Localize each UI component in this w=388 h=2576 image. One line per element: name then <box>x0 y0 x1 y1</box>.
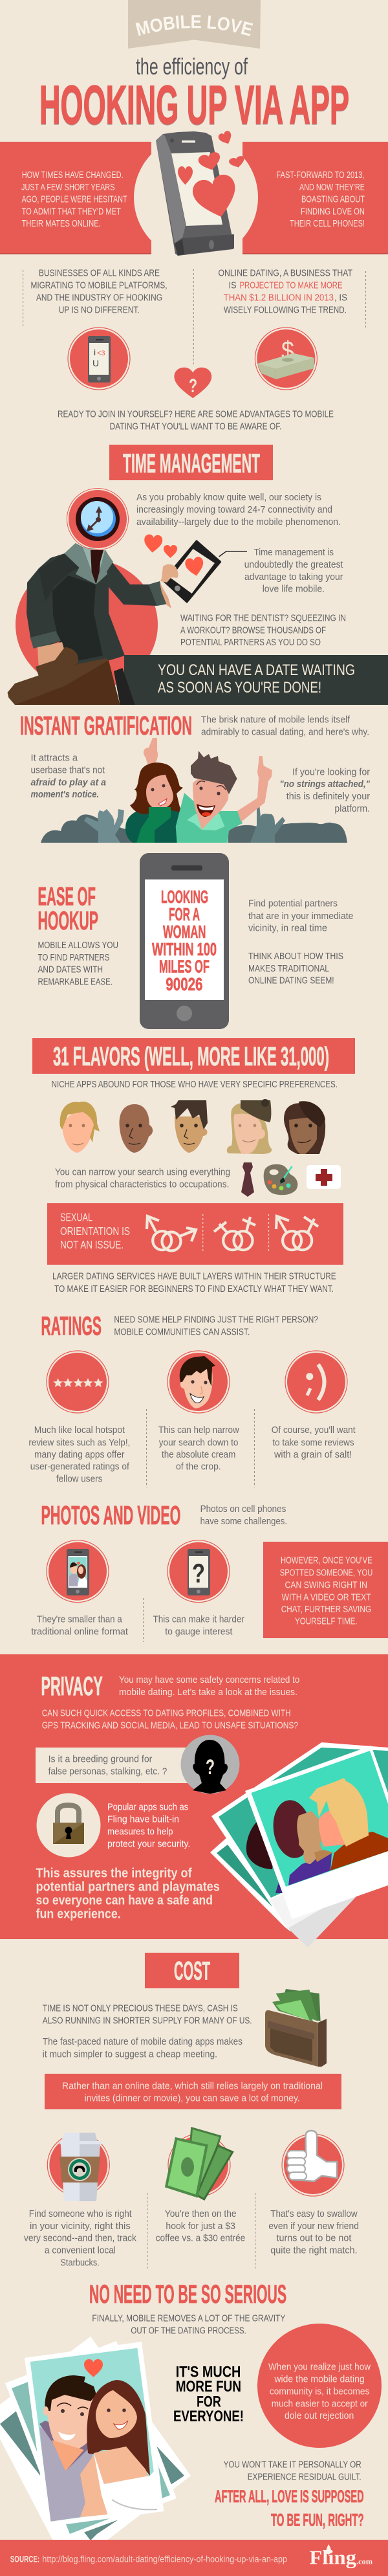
heading: ease of hookup <box>38 882 98 935</box>
text block: ready to join: READY TO JOIN IN YOURSELF? HERE ARE SOME ADVANTAGES TO MOBILE <box>58 409 334 419</box>
icon: question heart: ? <box>189 375 197 397</box>
text block: mobile allows you: REMARKABLE EASE. <box>38 977 113 987</box>
text block: rating 2 <box>158 1425 239 1472</box>
text block: find someone <box>24 2208 136 2268</box>
text block: rating 1: user-generated ratings of <box>30 1461 130 1472</box>
banner: date waiting: AS SOON AS YOU'RE DONE! <box>158 679 321 696</box>
text block: ratings intro <box>114 1315 318 1338</box>
text block: narrow your search: You can narrow your search using everything <box>55 1167 230 1178</box>
text block: intro right: THEIR CELL PHONES! <box>290 219 365 229</box>
text block: more fun: FOR <box>197 2393 221 2410</box>
text block: fast-paced: it much simpler to suggest a cheap meeting. <box>43 2049 217 2060</box>
text block: attracts a userbase: userbase that's not <box>31 765 105 775</box>
text block: intro left: THEIR MATES ONLINE. <box>22 219 101 229</box>
text block: assures the integrity: fun experience. <box>36 1907 121 1921</box>
heading: cost: COST <box>174 1957 210 1985</box>
text block: rating 1: fellow users <box>56 1473 102 1484</box>
text block: time is not only: TIME IS NOT ONLY PRECIOUS THESE DAYS, CASH IS <box>43 2004 238 2014</box>
callout: save money: Rather than an online date, which still relies largely on traditional <box>62 2080 323 2091</box>
heading: time management: TIME MANAGEMENT <box>123 448 260 478</box>
face 1 <box>60 1102 100 1153</box>
text block: safety concerns: You may have some safety concerns related to <box>119 1674 299 1685</box>
text block: easy to swallow <box>268 2208 359 2256</box>
text block: no strings attached: this is definitely your <box>286 791 370 802</box>
text block: assures the integrity <box>36 1867 220 1921</box>
icon: search phone: WOMAN <box>163 922 206 942</box>
callout: red circle: much easier to accept or <box>272 2398 368 2409</box>
icon: phone with photo <box>47 1540 109 1603</box>
text block: find someone: in your vicinity, right this <box>30 2221 131 2232</box>
text block: time management is: advantage to taking your <box>244 572 343 583</box>
text block: fast-paced: The fast-paced nature of mobile dating apps makes <box>43 2036 242 2047</box>
text block: assures the integrity: This assures the integrity of <box>36 1867 192 1881</box>
text block: narrow your search <box>55 1167 230 1190</box>
icon: phone badge: <3 <box>97 350 105 357</box>
text block: photos intro: have some challenges. <box>200 1516 287 1527</box>
icon: anonymous silhouette <box>181 1735 239 1794</box>
callout: red circle <box>257 2324 382 2448</box>
text block: more fun: EVERYONE! <box>173 2408 244 2425</box>
text block: online dating: , IS <box>334 293 347 303</box>
text block: find someone: very second--and then, track <box>24 2233 136 2244</box>
icon: search phone: MILES OF <box>159 957 210 977</box>
text block: unsafe situations <box>42 1709 298 1731</box>
text block: more fun: MORE FUN <box>176 2378 241 2395</box>
text block: rating 1 <box>28 1425 130 1484</box>
text block: rating 1: many dating apps offer <box>34 1449 124 1460</box>
icon: search phone: LOOKING <box>161 887 208 907</box>
icon: male female <box>276 1216 318 1250</box>
text block: ratings intro: MOBILE COMMUNITIES CAN ASSIST. <box>114 1327 250 1338</box>
text block: find someone: a convenient local <box>45 2245 116 2256</box>
text block: photos intro: Photos on cell phones <box>200 1504 286 1515</box>
text block: attracts a userbase <box>31 753 106 800</box>
heading: instant gratification: INSTANT GRATIFICATION <box>20 711 192 740</box>
text block: rating 3: with a grain of salt! <box>274 1449 352 1460</box>
panel: sexual orientation: NOT AN ISSUE. <box>60 1238 124 1251</box>
text block: finally: FINALLY, MOBILE REMOVES A LOT OF THE GRAVITY <box>92 2314 286 2324</box>
callout: false personas <box>36 1748 191 1783</box>
text block: find potential partners: that are in your immediate <box>248 911 353 922</box>
text block: intro right: BOASTING ABOUT <box>301 195 365 205</box>
panel: sexual orientation: SEXUAL <box>60 1211 92 1224</box>
text block: intro left: JUST A FEW SHORT YEARS <box>21 183 115 193</box>
text block: time is not only <box>43 2004 252 2026</box>
heading: ease of hookup: HOOKUP <box>38 907 98 935</box>
icon: search phone: 90026 <box>166 974 202 994</box>
callout: red circle: When you realize just how <box>268 2362 371 2373</box>
text block: no strings attached: "no strings attached," <box>279 779 371 790</box>
text block: harder: This can make it harder <box>153 1614 244 1625</box>
text block: easy to swallow: turns out to be not <box>277 2233 352 2244</box>
text block: intro right <box>277 170 365 229</box>
logo: fling.com: .com <box>356 2557 372 2566</box>
text block: larger dating services: TO MAKE IT EASIER FOR BEGINNERS TO FIND EXACTLY WHAT THEY WANT. <box>54 1284 334 1294</box>
face 4 <box>227 1099 272 1154</box>
heading: time management <box>109 445 273 480</box>
text block: popular apps: Fling have built-in <box>107 1814 179 1825</box>
text block: on the hook: hook for just a $3 <box>166 2221 235 2232</box>
text block: rating 2: This can help narrow <box>158 1425 239 1436</box>
text block: photos intro <box>200 1504 287 1527</box>
text block: finally <box>92 2314 286 2337</box>
text block: think about: MAKES TRADITIONAL <box>248 964 329 974</box>
text block: businesses: UP IS NO DIFFERENT. <box>59 305 140 315</box>
text block: on the hook: coffee vs. a $30 entrée <box>156 2233 245 2244</box>
face 5 <box>284 1101 325 1154</box>
text block: assures the integrity: potential partners and playmates <box>36 1880 220 1894</box>
text block: intro left: HOW TIMES HAVE CHANGED. <box>22 170 124 181</box>
text block: think about <box>248 951 343 986</box>
text block: fast-paced <box>43 2036 242 2060</box>
text block: more fun: IT'S MUCH <box>176 2364 241 2381</box>
footer <box>0 2540 388 2576</box>
text block: popular apps: measures to help <box>107 1826 173 1837</box>
text block: rating 2: your search down to <box>159 1437 238 1448</box>
text block: unsafe situations: CAN SUCH QUICK ACCESS TO DATING PROFILES, COMBINED WITH <box>42 1709 291 1719</box>
text block: smaller: traditional online format <box>31 1627 129 1638</box>
icon: search phone: WITHIN 100 <box>152 939 217 959</box>
text block: businesses: AND THE INDUSTRY OF HOOKING <box>36 293 162 303</box>
banner: mobile love <box>128 0 261 49</box>
icon: phone with question mark: ? <box>192 1558 205 1588</box>
panel: video or text chat: WITH A VIDEO OR TEXT <box>282 1592 371 1603</box>
icon: anonymous silhouette: ? <box>206 1755 215 1779</box>
illustration: kissing couple polaroids <box>210 1742 388 1948</box>
dividers <box>147 1409 254 1487</box>
text block: mobile allows you: AND DATES WITH <box>38 965 103 975</box>
text block: more fun <box>173 2364 244 2425</box>
text block: rating 1: Much like local hotspot <box>34 1425 125 1436</box>
text block: rating 2: the absolute cream <box>162 1449 235 1460</box>
text block: no strings attached: If you're looking for <box>292 766 370 777</box>
text block: on the hook: You're then on the <box>165 2208 237 2219</box>
text block: popular apps <box>107 1802 190 1849</box>
source: SOURCE: <box>10 2554 39 2564</box>
text block: online dating <box>219 269 352 315</box>
banner: date waiting <box>124 655 388 705</box>
text block: no strings attached: platform. <box>334 803 370 814</box>
banner: mobile love: MOBILE LOVE <box>136 15 253 36</box>
text block: online dating: ONLINE DATING, A BUSINESS THAT <box>219 269 352 279</box>
panel: sexual orientation: ORIENTATION IS <box>60 1225 130 1238</box>
text block: popular apps: protect your security. <box>107 1838 190 1849</box>
text block: rating 3: Of course, you'll want <box>272 1425 356 1436</box>
divider <box>143 1598 144 1642</box>
icon: phone with question mark <box>167 1540 230 1603</box>
text block: businesses: BUSINESSES OF ALL KINDS ARE <box>39 269 160 279</box>
text block: rating 2: of the crop. <box>176 1461 221 1472</box>
text block: find someone: Find someone who is right <box>29 2208 132 2219</box>
text block: connectivity: increasingly moving toward 24-7 connectivity and <box>136 504 332 515</box>
text block: online dating: WISELY FOLLOWING THE TREND. <box>224 305 347 315</box>
faces row <box>60 1099 325 1154</box>
text block: intro right: FINDING LOVE ON <box>301 207 365 217</box>
text block: waiting for the dentist: POTENTIAL PARTNERS AS YOU DO SO <box>180 638 321 648</box>
heading: cost <box>145 1953 239 1988</box>
panel: sexual orientation <box>47 1203 343 1265</box>
icon: thumbs up <box>282 2131 344 2196</box>
icon: smiling face <box>167 1351 230 1413</box>
icon: female female <box>214 1217 255 1250</box>
text block: easy to swallow: That's easy to swallow <box>270 2208 358 2219</box>
text block: connectivity: As you probably know quite well, our society is <box>136 492 321 503</box>
text block: think about: THINK ABOUT HOW THIS <box>248 951 343 962</box>
icon: phone badge <box>68 328 130 390</box>
logo: fling.com: Fling <box>309 2546 357 2569</box>
icon: money badge <box>255 328 317 390</box>
face 2 <box>119 1104 153 1153</box>
text block: online dating: PROJECTED TO MAKE MORE <box>239 281 343 291</box>
text block: attracts a userbase: afraid to play at a <box>31 777 106 788</box>
text block: attracts a userbase: moment's notice. <box>31 789 99 800</box>
text block: smaller: They're smaller than a <box>37 1614 122 1625</box>
text block: unsafe situations: GPS TRACKING AND SOCIAL MEDIA, LEAD TO UNSAFE SITUATIONS? <box>42 1721 298 1731</box>
icon: wink <box>285 1351 347 1413</box>
heading: photos and video: PHOTOS AND VIDEO <box>41 1500 180 1530</box>
heading: ratings: RATINGS <box>41 1311 102 1341</box>
icon: palette <box>264 1164 297 1195</box>
text block: safety concerns <box>119 1674 299 1698</box>
icon: question heart <box>174 368 211 398</box>
text block: harder <box>153 1614 244 1638</box>
panel: video or text chat <box>263 1542 388 1638</box>
background blob <box>16 559 158 691</box>
text block: connectivity <box>136 492 341 527</box>
text block: connectivity: availability--largely due to the mobile phenomenon. <box>136 516 341 527</box>
text block: intro left: AGO, PEOPLE WERE HESITANT <box>22 195 127 205</box>
text block: waiting for the dentist: A WORKOUT? BROWSE THOUSANDS OF <box>180 625 326 636</box>
text block: brisk nature <box>201 715 369 738</box>
text block: larger dating services <box>52 1272 336 1294</box>
source: http://blog.fling.com/adult-dating/efficiency-of-hooking-up-via-an-app <box>42 2554 287 2564</box>
text block: waiting for the dentist <box>180 613 346 648</box>
text block: online dating: THAN $1.2 BILLION IN 2013 <box>224 293 334 303</box>
illustration: businessman with clock head <box>8 488 247 705</box>
text block: time management is: Time management is <box>254 547 334 558</box>
icon: wallet with cash <box>265 1989 327 2067</box>
text block: time management is: undoubtedly the greatest <box>244 559 343 570</box>
text block: no strings attached <box>279 766 371 814</box>
text block: ready to join: DATING THAT YOU'LL WANT TO BE AWARE OF. <box>110 421 282 432</box>
text block: ratings intro: NEED SOME HELP FINDING JUST THE RIGHT PERSON? <box>114 1315 318 1326</box>
callout: save money: invites (dinner or movie), you can save a lot of money. <box>84 2093 300 2104</box>
text block: rating 3 <box>272 1425 356 1460</box>
text block: attracts a userbase: It attracts a <box>31 753 78 764</box>
text block: find potential partners: vicinity, in real time <box>248 923 327 934</box>
text block: rating 3: to take some reviews <box>272 1437 354 1448</box>
icon: search phone <box>140 853 229 1029</box>
panel: video or text chat: CAN SWING RIGHT IN <box>285 1580 367 1590</box>
text block: intro left: TO ADMIT THAT THEY'D MET <box>22 207 121 217</box>
text block: intro right: AND NOW THEY'RE <box>299 183 365 193</box>
icon: male male <box>147 1216 196 1250</box>
text block: easy to swallow: even if your new friend <box>268 2221 359 2232</box>
text block: safety concerns: mobile dating. Let's take a look at the issues. <box>119 1687 297 1698</box>
icon: five stars <box>47 1351 109 1413</box>
heading: ease of hookup: EASE OF <box>38 882 96 911</box>
text block: assures the integrity: so everyone can have a safe and <box>36 1893 213 1907</box>
face 3 <box>171 1100 208 1153</box>
text block: after all <box>215 2487 364 2530</box>
text block: harder: to gauge interest <box>165 1627 233 1638</box>
text block: find potential partners: Find potential partners <box>248 898 338 909</box>
callout: false personas: Is it a breeding ground for <box>48 1754 152 1765</box>
callout: red circle: wide the mobile dating <box>274 2374 365 2385</box>
text block: time is not only: ALSO RUNNING IN SHORTER SUPPLY FOR MANY OF US. <box>43 2015 252 2026</box>
text block: mobile allows you: MOBILE ALLOWS YOU <box>38 940 118 951</box>
text block: popular apps: Popular apps such as <box>107 1802 188 1813</box>
text block: find someone: Starbucks. <box>60 2257 100 2268</box>
illustration: couple polaroids <box>0 2337 191 2540</box>
icon: first aid <box>307 1165 341 1189</box>
icon: phone with hearts <box>156 130 246 256</box>
text block: find potential partners <box>248 898 353 934</box>
icon: padlock <box>36 1793 101 1858</box>
callout: save money <box>45 2074 341 2109</box>
text block: won't take it personally <box>224 2460 361 2483</box>
text block: narrow your search: from physical characteristics to occupations. <box>55 1179 229 1190</box>
dividers <box>23 269 366 366</box>
callout: false personas: false personas, stalking, etc. ? <box>48 1766 167 1777</box>
text block: rating 1: review sites such as Yelp!, <box>28 1437 130 1448</box>
text block: businesses: MIGRATING TO MOBILE PLATFORMS, <box>31 281 167 291</box>
text block: time management is: love life mobile. <box>263 584 325 595</box>
icon: phone badge: i <box>94 347 96 357</box>
icon: coffee cup <box>47 2133 109 2201</box>
icon: phone badge: U <box>92 358 99 368</box>
icon: cash <box>166 2128 233 2199</box>
text block: mobile allows you <box>38 940 118 987</box>
logo: fling.com <box>309 2544 372 2569</box>
text block: ready to join <box>58 409 334 432</box>
text block: online dating: IS <box>229 281 237 291</box>
text block: smaller <box>31 1614 129 1638</box>
text block: think about: ONLINE DATING SEEM! <box>248 976 334 986</box>
callout: red circle: community is, it becomes <box>270 2386 369 2397</box>
text block: waiting for the dentist: WAITING FOR THE DENTIST? SQUEEZING IN <box>180 613 346 623</box>
panel: intro red band <box>0 135 388 260</box>
text block: easy to swallow: quite the right match. <box>270 2245 358 2256</box>
text block: on the hook <box>156 2208 245 2244</box>
text block: businesses <box>31 269 167 315</box>
icon: money badge: $ <box>281 335 294 366</box>
icon: tie <box>241 1162 254 1197</box>
panel: privacy <box>0 1654 388 1939</box>
text block: time management is <box>244 547 343 595</box>
panel: video or text chat: YOURSELF TIME. <box>295 1617 358 1627</box>
text block: finally: OUT OF THE DATING PROCESS. <box>131 2326 246 2337</box>
illustration: cheering couple and crowd <box>41 738 347 843</box>
text block: brisk nature: admirably to casual dating, and here's why. <box>201 727 369 738</box>
dividers <box>147 2193 255 2269</box>
callout: red circle: dole out rejection <box>285 2410 354 2421</box>
text block: brisk nature: The brisk nature of mobile lends itself <box>201 715 350 726</box>
heading: privacy: PRIVACY <box>41 1671 103 1701</box>
text block: mobile allows you: TO FIND PARTNERS <box>38 953 110 963</box>
text block: intro left <box>21 170 127 229</box>
icon: search phone: FOR A <box>169 904 200 924</box>
subtitle: the efficiency of <box>136 53 248 80</box>
text block: won't take it personally: EXPERIENCE RESIDUAL GUILT. <box>248 2472 361 2483</box>
